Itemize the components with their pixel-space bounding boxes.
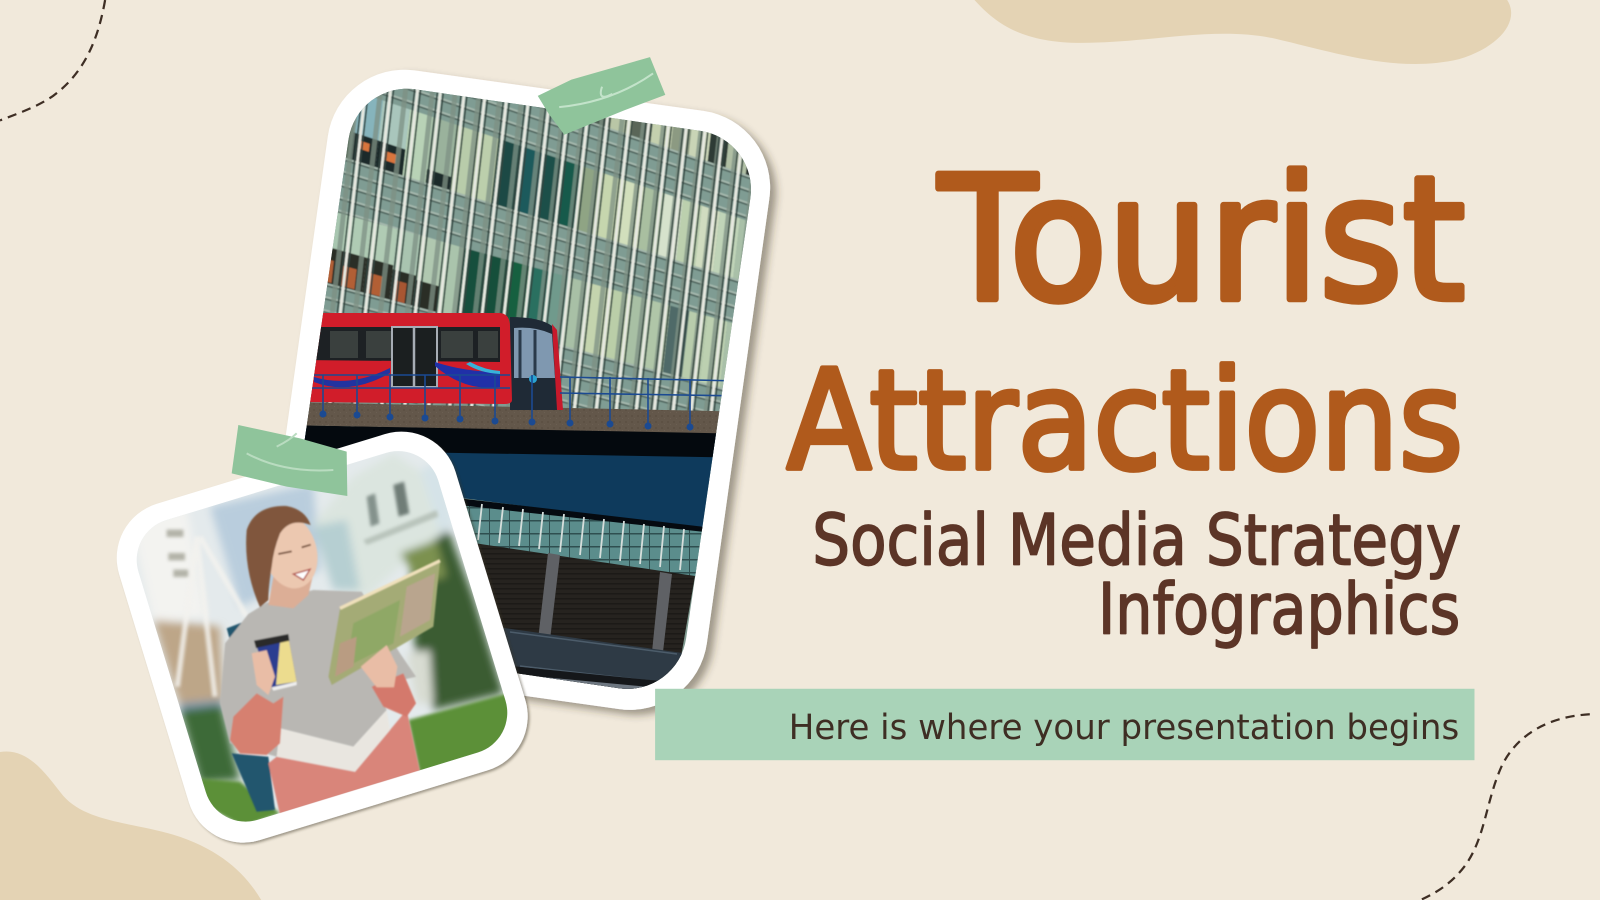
title: Tourist: Tourist	[938, 141, 1465, 340]
bridge underside	[304, 428, 716, 529]
face	[255, 509, 325, 595]
woman	[220, 506, 440, 815]
window row B	[346, 98, 747, 280]
wall pillars	[538, 553, 560, 640]
glass facade	[306, 88, 751, 487]
dashed line: bottom right	[1420, 714, 1590, 900]
photo card: woman with map	[103, 418, 542, 857]
mullion shadows	[306, 89, 744, 428]
dashed line: top left	[0, 0, 105, 120]
backpack	[227, 620, 275, 812]
eyes	[278, 545, 311, 554]
tape: top card	[538, 57, 665, 135]
train door	[392, 327, 437, 387]
hand with map	[361, 645, 397, 687]
tagline text: Here is where your presentation begins	[789, 708, 1459, 748]
railing dots	[320, 410, 694, 430]
subtitle: Infographics: Infographics	[1098, 569, 1460, 651]
spandrel row 1	[376, 88, 751, 220]
white frame	[103, 418, 542, 857]
tape: bottom card	[232, 425, 347, 496]
smile	[293, 569, 310, 580]
title: Attractions: Attractions	[787, 341, 1463, 501]
photo	[136, 425, 508, 822]
train front	[510, 317, 560, 410]
bridge deck	[306, 402, 720, 434]
train windows	[300, 327, 500, 362]
grass	[200, 692, 513, 827]
train body	[300, 313, 512, 404]
ferris wheel	[167, 533, 247, 697]
blurred background	[130, 453, 503, 783]
tower windows	[363, 482, 438, 545]
top window row	[594, 118, 750, 176]
neck	[268, 573, 313, 608]
white frame	[255, 60, 780, 720]
railing	[300, 375, 740, 426]
blob: bottom left	[0, 751, 261, 900]
tagline bar	[655, 689, 1474, 760]
spandrel row 2	[338, 157, 738, 323]
left sleeve	[230, 693, 283, 755]
train	[300, 313, 563, 410]
wall railing	[504, 628, 682, 681]
train swoosh	[435, 362, 500, 388]
blob: top right	[974, 0, 1511, 64]
spandrel row 3	[314, 282, 722, 487]
chevron	[277, 710, 390, 772]
photo card: building and train	[286, 70, 782, 720]
map	[328, 561, 440, 685]
sweater	[220, 590, 416, 757]
hand with cup	[252, 650, 275, 695]
cup	[254, 634, 297, 691]
right sleeve	[372, 673, 416, 717]
window frames	[330, 88, 751, 411]
window row C	[328, 212, 732, 388]
sweater hem	[268, 710, 420, 815]
subtitle: Social Media Strategy: Social Media Strategy	[812, 499, 1461, 581]
hair	[246, 506, 311, 607]
lower glass strip	[464, 498, 702, 578]
photo	[304, 88, 751, 689]
mullions	[326, 90, 742, 427]
lower dark wall	[478, 544, 695, 689]
